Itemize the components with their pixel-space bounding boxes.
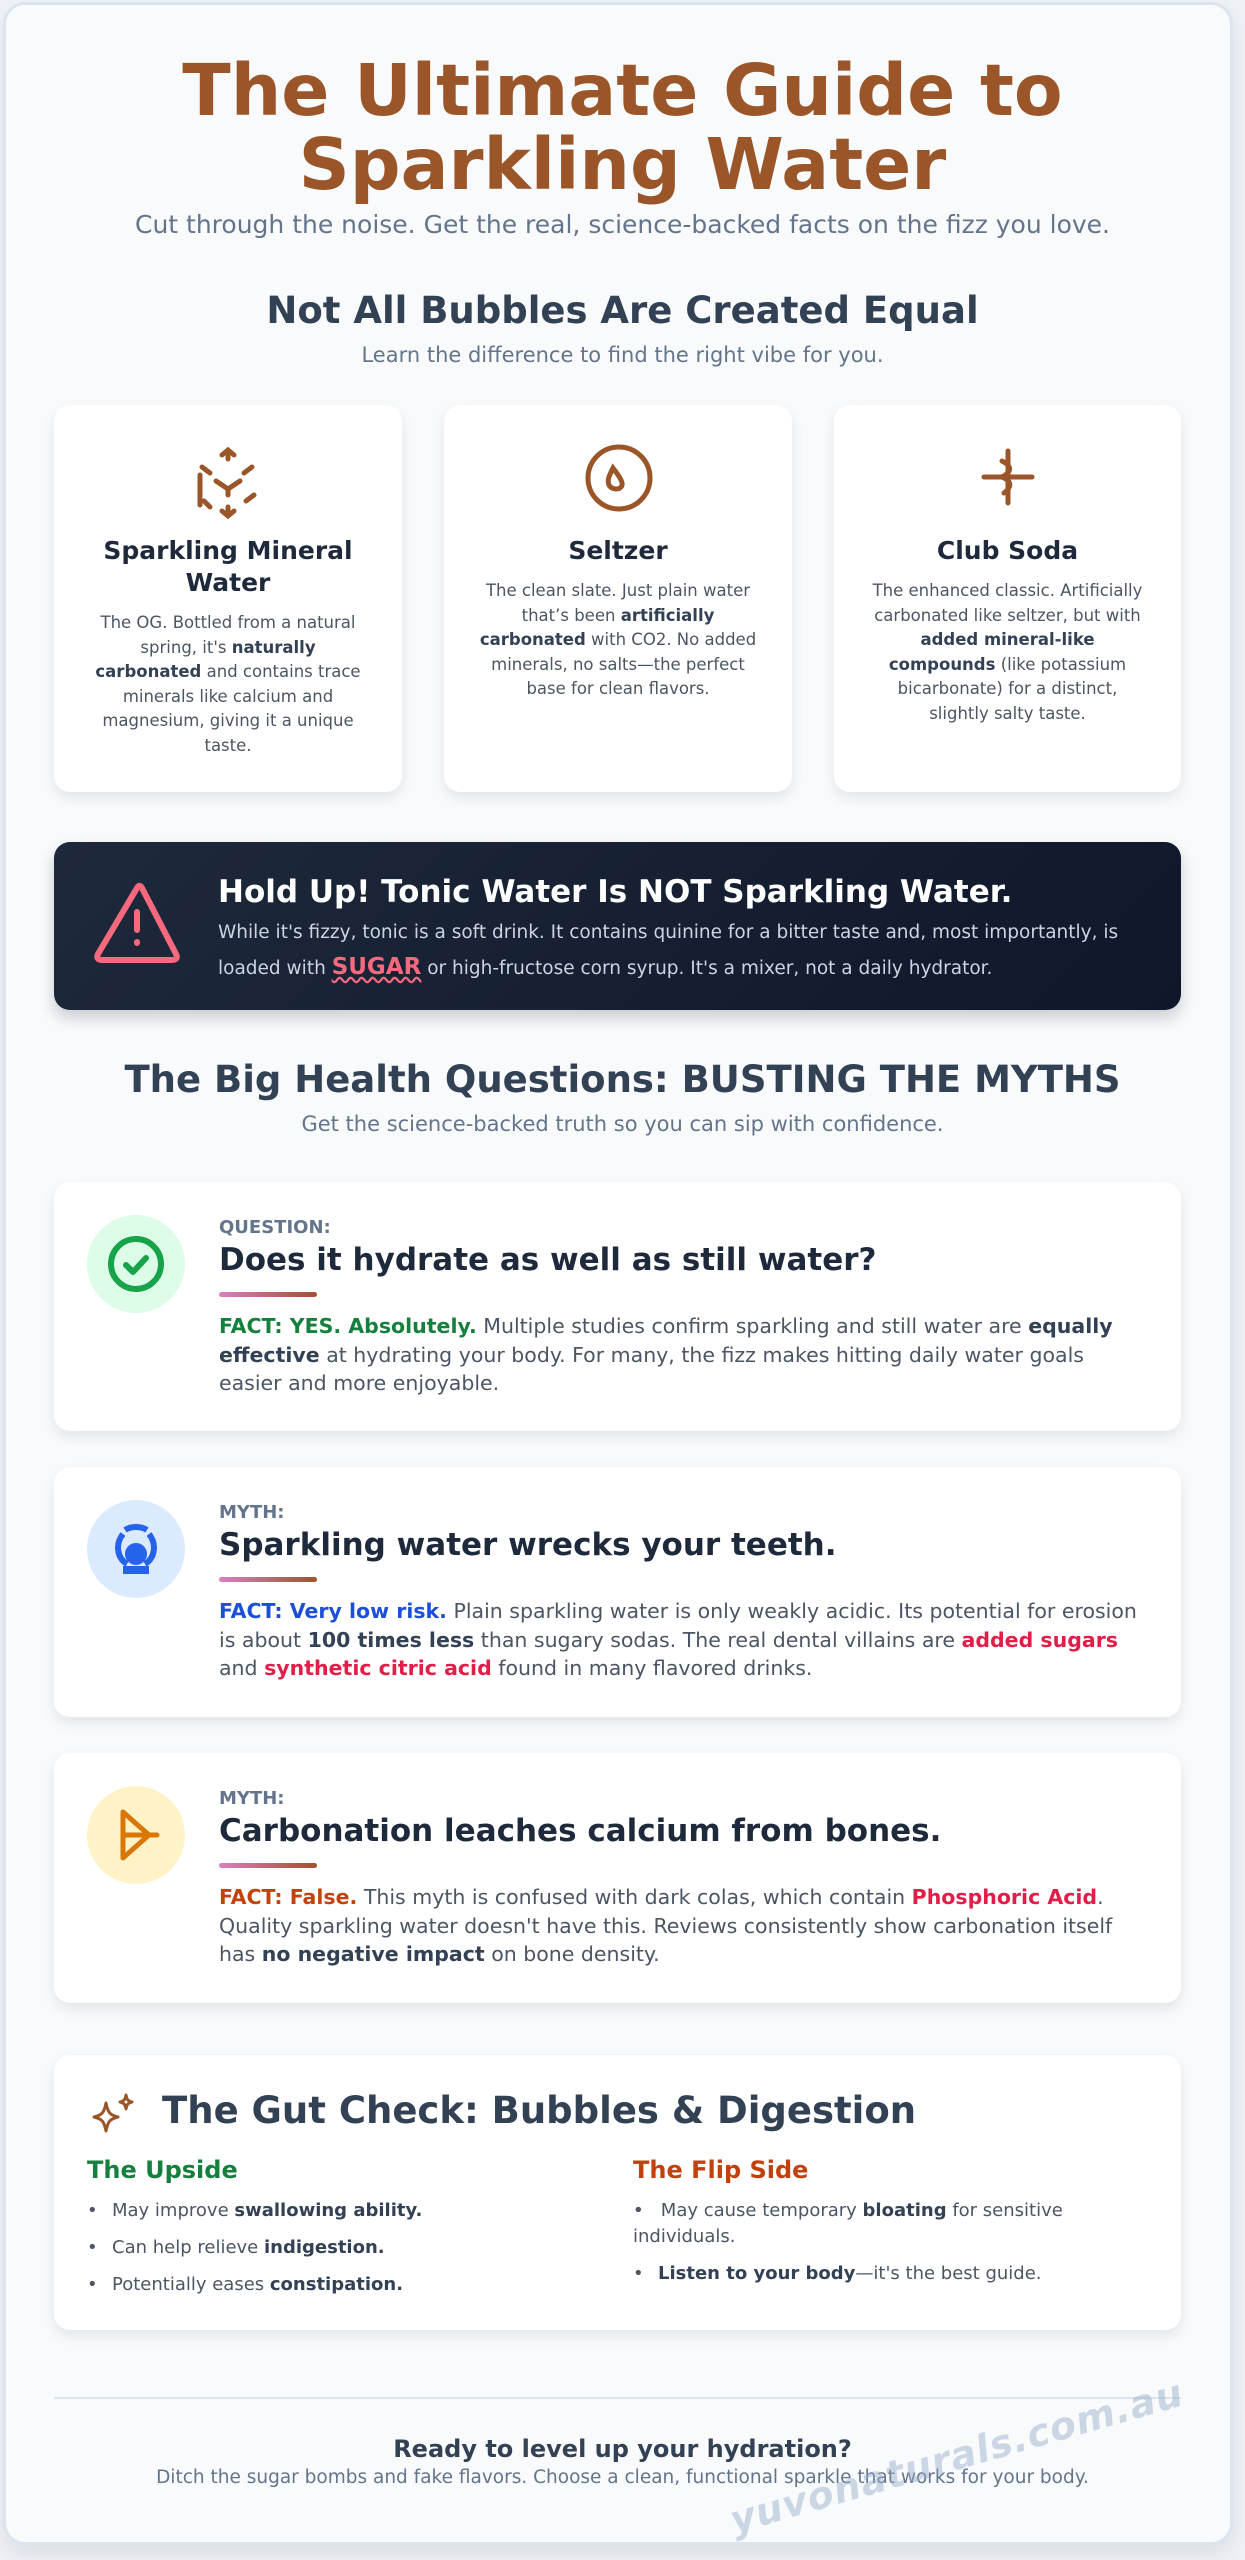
panel: seltzer: The clean slate. Just plain water that’s been artificially carbonated with CO2. No added minerals, no salts—the perfect base for clean flavors.: [480, 581, 756, 698]
panel: hydration question: [54, 1182, 1181, 1431]
panel: club soda: The enhanced classic. Artificially carbonated like seltzer, but with added mineral-like compounds (like potassium bicarbonate) for a distinct, slightly salty taste.: [873, 581, 1142, 722]
panel: club soda: [834, 405, 1181, 792]
column: flip side: [633, 2156, 1063, 2284]
panel: sparkling mineral water: Water: [186, 568, 270, 597]
column: upside: Potentially eases constipation.: [112, 2274, 403, 2295]
text: FACT: Very low risk. Plain sparkling water is only weakly acidic. Its potential for erosion is about 100 times less than sugary sodas. The real dental villains are added sugars and synthetic citric acid found in many flavored drinks.: [219, 1599, 1137, 1680]
panel: bones myth: MYTH:: [219, 1788, 284, 1809]
footer text: Ditch the sugar bombs and fake flavors. Choose a clean, functional sparkle that works for your body.: [156, 2467, 1089, 2488]
panel: sparkling mineral water: The OG. Bottled from a natural spring, it's naturally carbonated and contains trace minerals like calcium and magnesium, giving it a unique taste.: [95, 613, 361, 754]
section heading: myths: The Big Health Questions: BUSTING THE MYTHS: [124, 1058, 1121, 1101]
panel: bones myth: [54, 1753, 1181, 2003]
callout text: While it's fizzy, tonic is a soft drink. It contains quinine for a bitter taste and, most importantly, is loaded with SUGAR or high-fructose corn syrup. It's a mixer, not a daily hydrator.: [218, 922, 1118, 980]
panel: teeth myth: MYTH:: [219, 1502, 284, 1523]
icon: bone: [87, 1786, 185, 1884]
column: flip side: The Flip Side: [633, 2156, 808, 2184]
footer heading: Ready to level up your hydration?: [393, 2435, 852, 2463]
callout heading: Hold Up! Tonic Water Is NOT Sparkling Water.: [218, 874, 1012, 910]
heading: The Gut Check: Bubbles & Digestion: [162, 2089, 916, 2132]
title: The Ultimate Guide to: [182, 49, 1063, 132]
column: flip side: • May cause temporary bloating for sensitive individuals.: [633, 2200, 1063, 2247]
panel: sparkling mineral water: Sparkling Mineral: [103, 536, 353, 565]
panel: teeth myth: [54, 1467, 1181, 1717]
title: Sparkling Water: [299, 123, 946, 206]
column: upside: [87, 2156, 422, 2295]
watermark: yuvonaturals.com.au: [725, 2371, 1188, 2542]
heading: Carbonation leaches calcium from bones.: [219, 1813, 941, 1849]
icon: sparkle: [92, 2094, 134, 2132]
icon: warning triangle: [94, 882, 180, 963]
icon: tooth: [87, 1500, 185, 1598]
icon: club soda: [982, 448, 1034, 506]
icon: check: [87, 1215, 185, 1313]
column: flip side: Listen to your body—it's the best guide.: [658, 2263, 1042, 2284]
panel: seltzer: Seltzer: [568, 536, 668, 565]
panel: seltzer: [444, 405, 792, 792]
callout: tonic warning: [54, 842, 1181, 1010]
column: upside: May improve swallowing ability.: [112, 2200, 422, 2221]
text: FACT: False. This myth is confused with dark colas, which contain Phosphoric Acid. Quality sparkling water doesn't have this. Reviews consistently show carbonation itself has no negative impact on bone density.: [219, 1885, 1112, 1966]
panel: gut check: [54, 2055, 1181, 2330]
section subheading: Learn the difference to find the right vibe for you.: [361, 343, 884, 367]
heading: Does it hydrate as well as still water?: [219, 1242, 876, 1278]
section subheading: Get the science-backed truth so you can sip with confidence.: [301, 1112, 944, 1136]
heading: Sparkling water wrecks your teeth.: [219, 1527, 837, 1563]
text: FACT: YES. Absolutely. Multiple studies confirm sparkling and still water are equally effective at hydrating your body. For many, the fizz makes hitting daily water goals easier and more enjoyable.: [219, 1314, 1113, 1395]
panel: club soda: Club Soda: [937, 536, 1078, 565]
panel: sparkling mineral water: [54, 405, 402, 792]
icon: drop circle: [586, 444, 652, 512]
column: upside: The Upside: [87, 2156, 238, 2184]
icon: mineral: [198, 446, 256, 520]
title: [182, 49, 1063, 206]
column: upside: Can help relieve indigestion.: [112, 2237, 385, 2258]
section heading: types: Not All Bubbles Are Created Equal: [266, 289, 979, 332]
panel: hydration question: QUESTION:: [219, 1217, 331, 1238]
subtitle: Cut through the noise. Get the real, science-backed facts on the fizz you love.: [135, 210, 1110, 239]
